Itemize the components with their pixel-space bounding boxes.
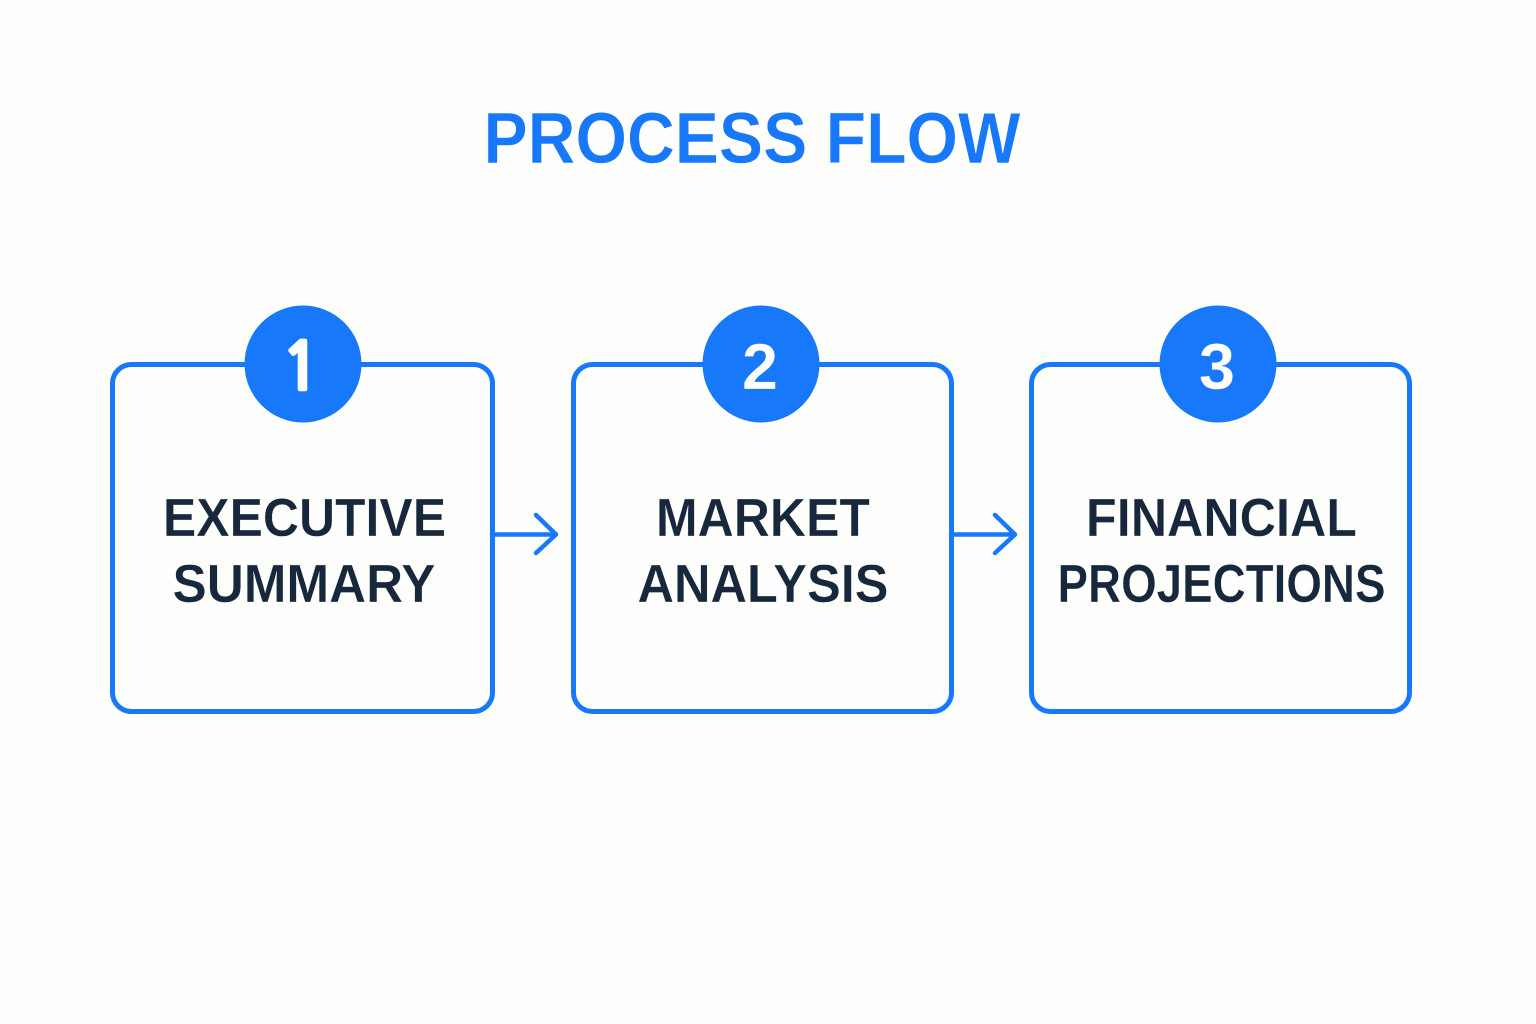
panel: step 1 [112,306,492,712]
badge: number 3: 3 [1199,330,1235,403]
label: market analysis: ANALYSIS [638,554,888,614]
arrow: step 2 to step 3 [951,515,1015,553]
label: financial projections: PROJECTIONS [1058,554,1386,614]
badge: number 3 [1160,306,1276,422]
arrow: step 1 to step 2 [492,515,556,553]
badge: number 2: 2 [742,330,778,403]
panel: step 2 [574,306,952,712]
panel: step 3 [1032,306,1410,712]
label: financial projections: FINANCIAL [1086,488,1357,548]
label: executive summary: SUMMARY [172,554,436,614]
badge: number 2 [702,306,820,422]
badge: number 1: 1 [281,334,321,400]
label: executive summary: EXECUTIVE [163,488,446,548]
badge: number 1 [244,306,362,422]
title: PROCESS FLOW [484,99,1021,179]
label: market analysis: MARKET [656,488,870,548]
